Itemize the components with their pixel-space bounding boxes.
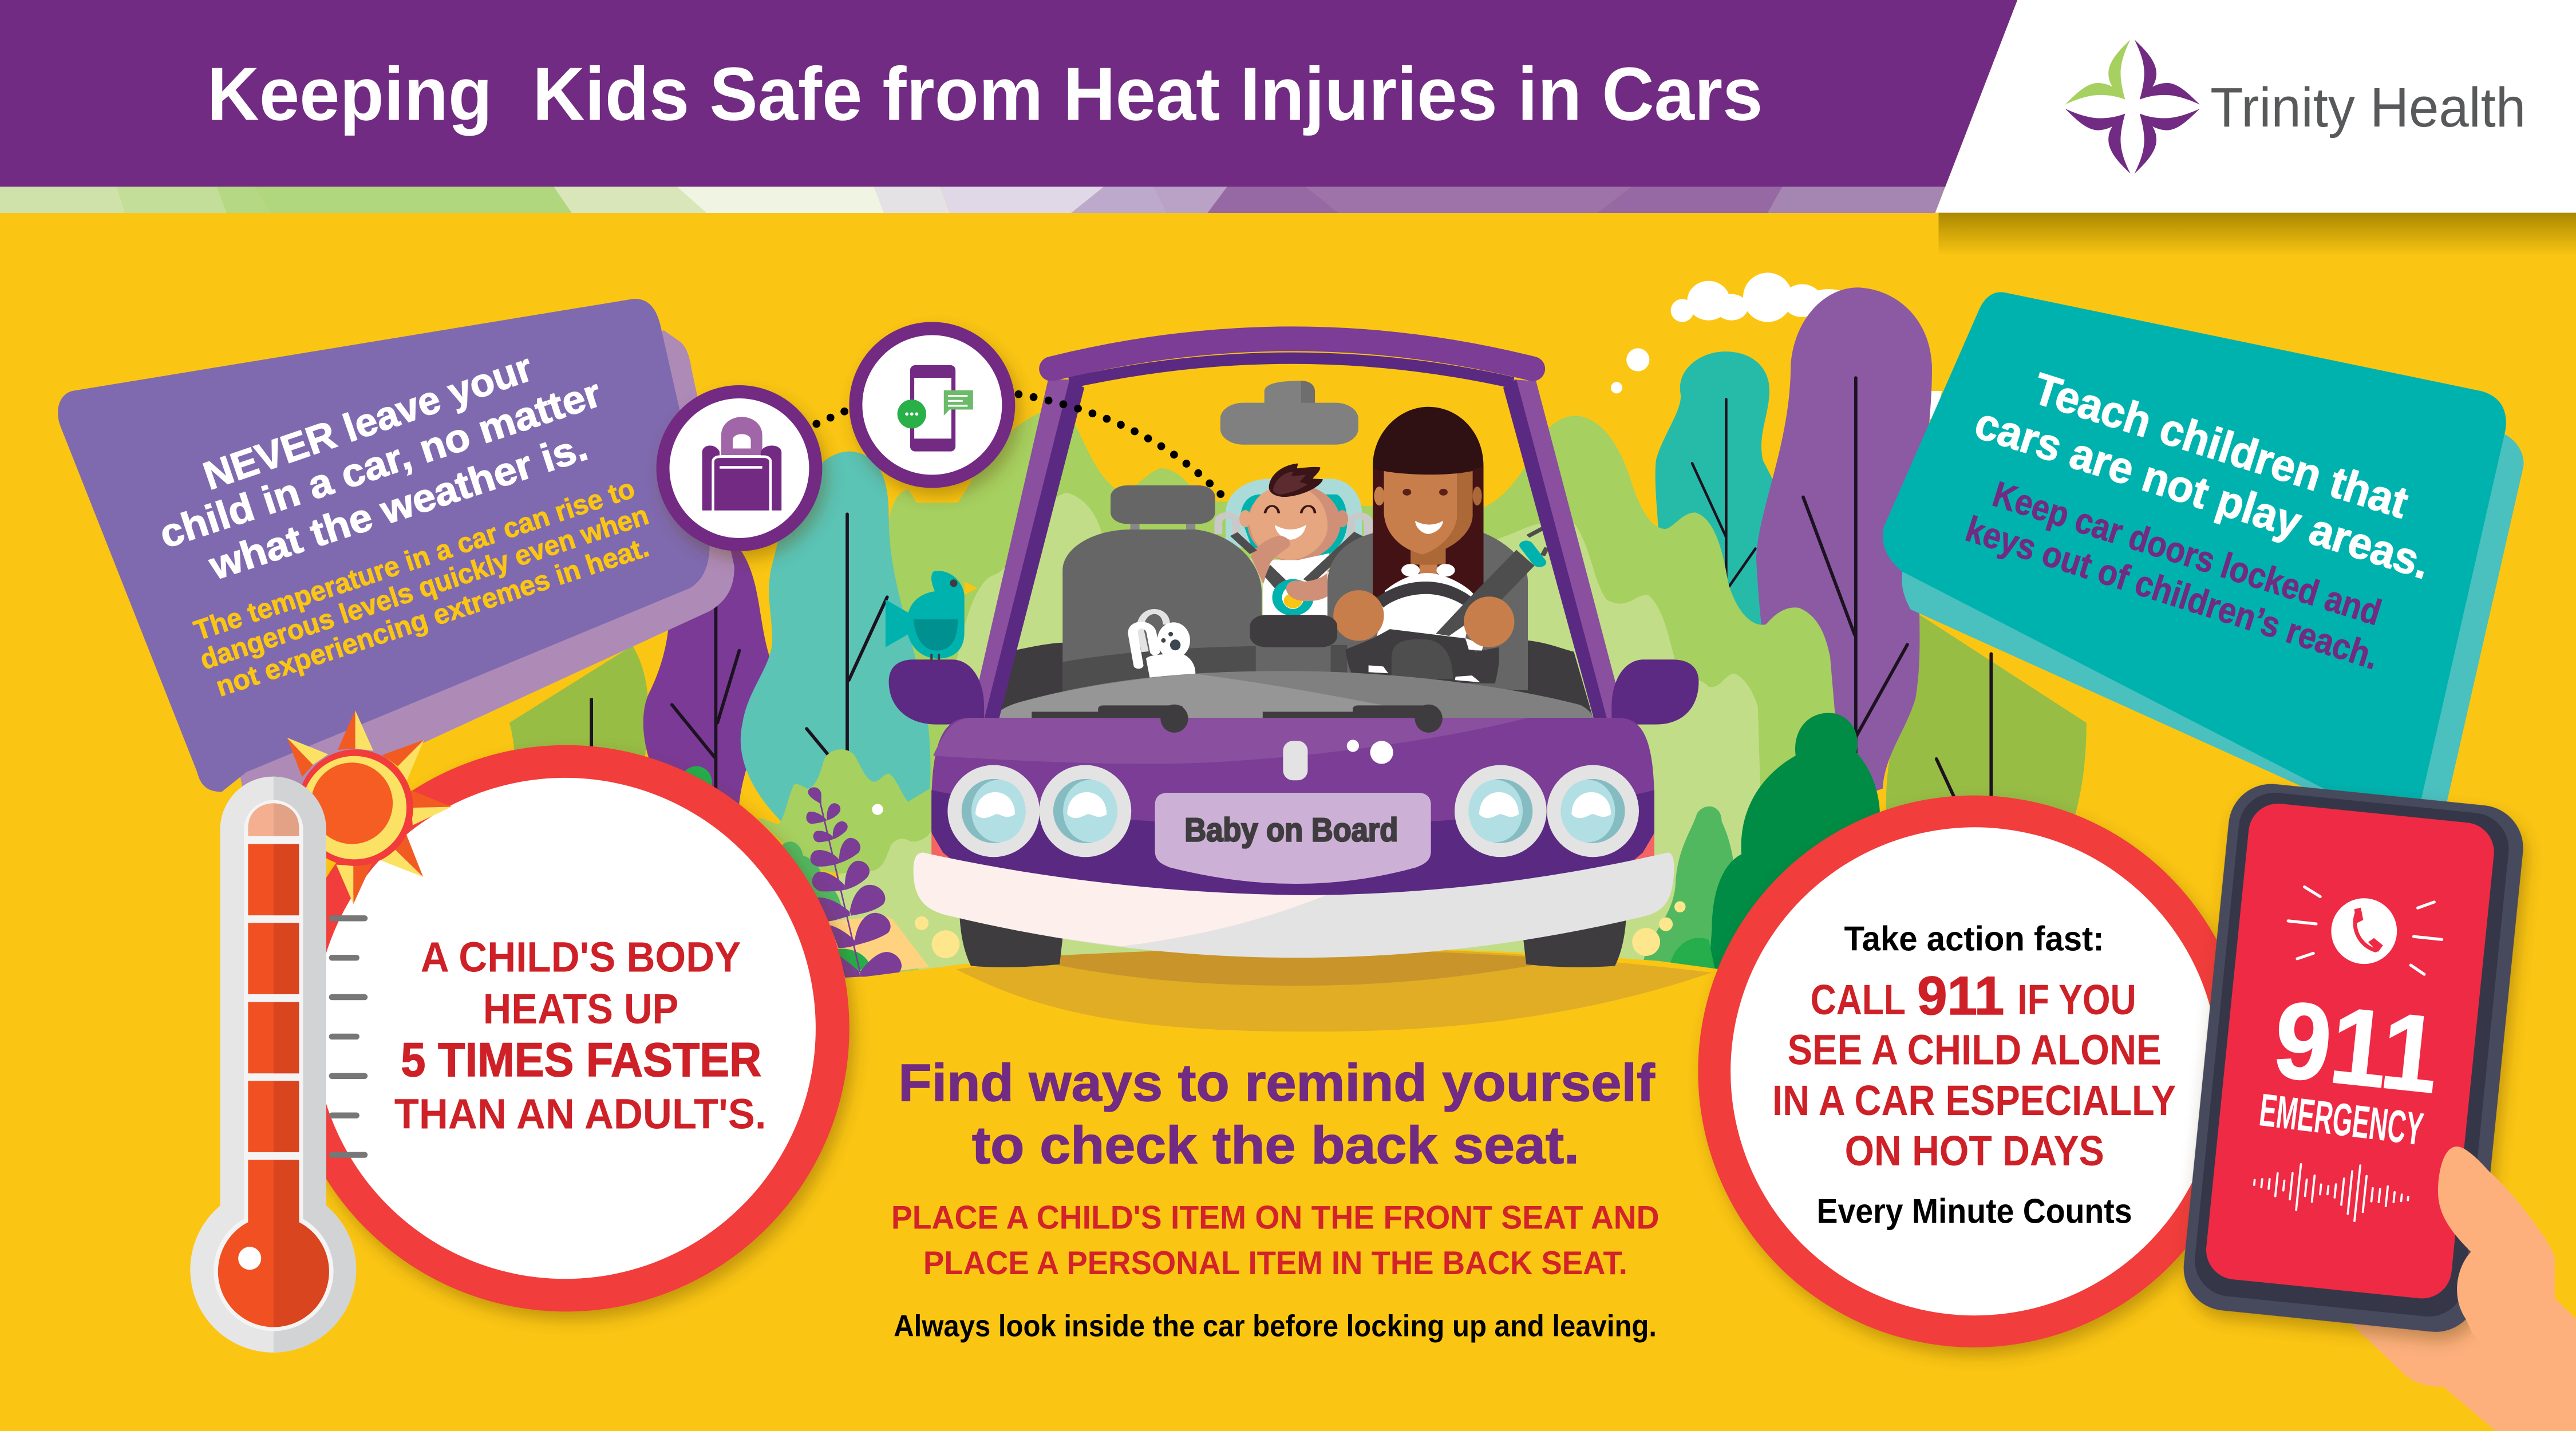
hand thumb: [2438, 1147, 2576, 1426]
call 911: ON HOT DAYS: [1845, 1126, 2104, 1175]
circle: take action: [1698, 796, 2250, 1347]
car shadow: [956, 947, 1712, 1031]
inner white: [1730, 827, 2219, 1315]
logo: Trinity Health: [2065, 39, 2526, 174]
logo wordmark: Trinity Health: [2210, 76, 2526, 139]
right trees: [1656, 287, 2087, 854]
911: 911: [2269, 979, 2444, 1116]
dotted connector: [816, 394, 1226, 499]
tree: left green stem: [591, 698, 592, 772]
thermometer body: [190, 777, 356, 1353]
passenger seat: [1062, 529, 1262, 686]
grille marks: [1283, 740, 1393, 780]
plate text: Baby on Board: [1184, 812, 1398, 848]
colour strip: [0, 187, 1945, 213]
text: child heats: 5 TIMES FASTER: [401, 1033, 761, 1086]
tree: right green: [1886, 611, 2087, 854]
message bubble 2: [944, 390, 973, 416]
highlight: [238, 1247, 261, 1270]
rear view mirror: [1220, 381, 1358, 445]
steering wheel: [1345, 582, 1499, 683]
bubble details: [948, 396, 967, 406]
text: child heats: HEATS UP: [483, 985, 678, 1033]
tree: purple stem: [1803, 378, 1991, 821]
bush: dark green: [1709, 713, 1880, 986]
tree: teal: [1656, 351, 1791, 657]
windshield pillars and roof: [969, 339, 1625, 723]
console: [1250, 615, 1337, 673]
tree: left teal: [741, 452, 930, 854]
card: [58, 299, 710, 792]
belt tip: [1528, 528, 1547, 556]
call 911: [1772, 966, 2176, 1175]
toy bunny: [1133, 611, 1195, 679]
phone icon: [910, 365, 955, 452]
left trees: [509, 452, 930, 854]
card heading: what the weather is.: [203, 425, 592, 588]
phone screen: [914, 378, 951, 438]
every minute counts: Every Minute Counts: [1817, 1191, 2132, 1230]
call 911: CALL: [1811, 975, 1906, 1023]
card heading: Teach children that: [2028, 364, 2414, 528]
scale ticks: [332, 918, 365, 1155]
card body: not experiencing extremes in heat.: [212, 532, 653, 703]
card: [1883, 292, 2506, 805]
licence plate: [1155, 793, 1431, 884]
baby seat: [1214, 479, 1373, 557]
mercury top shade: [274, 803, 299, 836]
text: child heats: A CHILD'S BODY: [421, 933, 741, 981]
panel: teach children: [1883, 292, 2524, 805]
take action fast: Take action fast:: [1844, 919, 2104, 958]
heading: to check the back seat.: [972, 1116, 1579, 1175]
driver: [1373, 407, 1484, 638]
red instructions: [891, 1200, 1660, 1282]
hill: green: [757, 749, 932, 873]
call 911: IF YOU: [2017, 975, 2136, 1023]
card heading: cars are not play areas.: [1969, 398, 2436, 588]
phone: [2179, 780, 2527, 1336]
seat lower band: [1062, 645, 1347, 693]
bumper: [914, 852, 1674, 958]
hill: pale: [828, 830, 962, 971]
header bar: [0, 0, 2017, 213]
bird: [886, 571, 978, 661]
logo mark: [2065, 39, 2200, 174]
sand path: [828, 916, 929, 977]
body highlight: [933, 718, 1528, 764]
bush: green: [782, 841, 841, 906]
back of hand: [2341, 1298, 2576, 1431]
text: find ways: [891, 1054, 1660, 1343]
phone screen: [2203, 801, 2497, 1301]
inner white: [315, 778, 816, 1279]
bush: light green: [1643, 807, 1735, 978]
heading: Find ways to remind yourself: [898, 1054, 1655, 1112]
driver hands: [1333, 590, 1514, 647]
rays: [2288, 887, 2442, 974]
car body: [931, 718, 1654, 901]
wheels: [959, 907, 1626, 967]
tree: teal stem: [1692, 399, 1755, 587]
roof: [1052, 339, 1533, 369]
dashboard: [989, 641, 1594, 720]
card body: keys out of children’s reach.: [1961, 509, 2384, 677]
call 911: 911: [1917, 966, 2004, 1026]
passenger seat headrest: [1130, 523, 1195, 532]
bush: bright: [1669, 938, 1717, 978]
tree: purple: [1756, 287, 1932, 821]
heading: [898, 1054, 1655, 1175]
hills behind car: [887, 408, 1840, 986]
white dot: [872, 804, 883, 815]
headlights: [947, 765, 1639, 857]
bag lines: [713, 457, 771, 511]
bag body: [702, 445, 781, 511]
seatbelt: [1436, 550, 1534, 636]
phone frame: [2179, 780, 2527, 1336]
pale hills behind car: [907, 493, 1766, 986]
headrest: [1111, 485, 1215, 524]
card body: The temperature in a car can rise to: [190, 473, 638, 646]
bush: bright green: [837, 948, 870, 978]
icon: phone circle: [856, 329, 1009, 481]
small sky dots: [1611, 348, 1649, 393]
left pillar: [969, 380, 1071, 723]
tree: left green: [509, 646, 649, 789]
small yellow dots: [915, 901, 1686, 958]
message bubbles: [898, 400, 926, 428]
bag handle: [721, 417, 762, 455]
car interior: [989, 381, 1594, 720]
card shadow: [214, 330, 734, 805]
card body: Keep car doors locked and: [1988, 474, 2386, 633]
card heading: NEVER leave your: [198, 345, 538, 499]
circle: child's body: [283, 745, 850, 1311]
sound wave: [2251, 1155, 2411, 1226]
thermometer channel: [214, 800, 334, 1331]
baby: [1234, 464, 1358, 615]
tree: left purple: [643, 525, 774, 838]
driver seat: [1327, 533, 1528, 690]
bubble dots: [905, 412, 918, 416]
call 911: IN A CAR ESPECIALLY: [1772, 1076, 2176, 1124]
red body corners: [931, 833, 1654, 867]
text: child heats: [394, 933, 767, 1138]
wipers: [1032, 705, 1443, 733]
lavender plant: [806, 787, 902, 978]
mercury shade: [274, 844, 329, 1327]
roof dark band: [1069, 358, 1513, 383]
right pillar: [1513, 380, 1625, 718]
icon: thermometer: [190, 777, 365, 1353]
call 911: SEE A CHILD ALONE: [1787, 1026, 2162, 1074]
belt buckle: [1526, 545, 1539, 562]
card heading: child in a car, no matter: [154, 370, 606, 556]
red instructions: PLACE A CHILD'S ITEM ON THE FRONT SEAT AND: [891, 1200, 1660, 1236]
call icon: [2288, 887, 2442, 974]
header shadow: [1938, 212, 2576, 256]
reminder: Always look inside the car before locking up and leaving.: [894, 1309, 1657, 1343]
icon: sun: [287, 710, 452, 904]
icon: bag circle: [663, 392, 816, 544]
hood: [994, 671, 1594, 718]
emergency: EMERGENCY: [2257, 1084, 2426, 1155]
panel: never leave: [58, 299, 734, 805]
card body: dangerous levels quickly even when: [196, 500, 652, 675]
small bush: [681, 766, 712, 798]
body lower band: [931, 790, 1654, 901]
car: [886, 339, 1698, 967]
card shadow: [1902, 410, 2524, 805]
tree stems: [672, 514, 887, 789]
lower left foliage and plant: [681, 749, 962, 978]
side mirrors: [889, 659, 1698, 725]
logo panel: [1935, 0, 2576, 213]
title: Keeping Kids Safe from Heat Injuries in Cars: [207, 52, 1763, 136]
ground: [821, 948, 1840, 1084]
right bushes: [1643, 713, 1880, 986]
mercury: [218, 844, 329, 1327]
mercury top: [248, 803, 299, 836]
phone frame inner: [2191, 789, 2512, 1320]
thermometer shade: [274, 776, 356, 1353]
handset: [2354, 908, 2383, 952]
cloud: [1671, 272, 1942, 421]
text: child heats: THAN AN ADULT'S.: [394, 1090, 767, 1138]
red instructions: PLACE A PERSONAL ITEM IN THE BACK SEAT.: [923, 1245, 1627, 1282]
